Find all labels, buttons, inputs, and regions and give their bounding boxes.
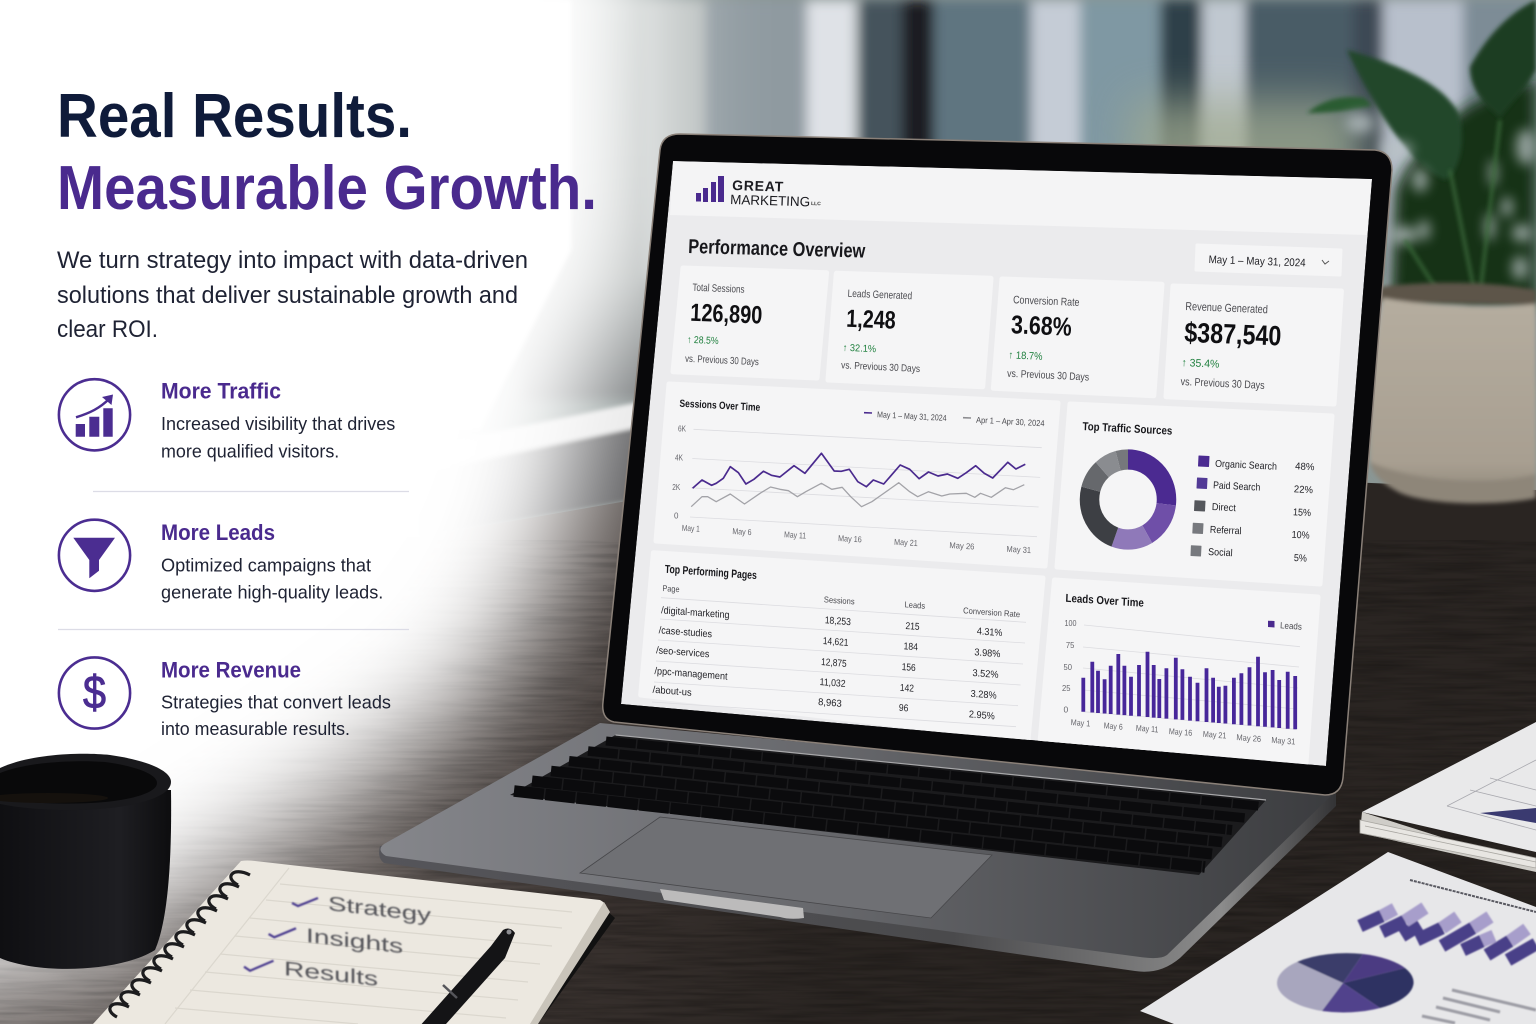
benefit: more leads: generate high-quality leads. bbox=[161, 583, 383, 603]
KPI card: total sessions: Total Sessions bbox=[692, 282, 745, 296]
table row: about us bbox=[652, 685, 995, 722]
chart axes bbox=[672, 424, 1042, 555]
leads chart axes: May 31 bbox=[1271, 735, 1296, 747]
KPI card: total sessions: 126,890 bbox=[690, 299, 763, 330]
leads chart axes: May 26 bbox=[1236, 732, 1262, 744]
KPI card: leads generated bbox=[828, 273, 991, 387]
leads chart axes: May 6 bbox=[1104, 720, 1123, 732]
papers: lower report with charts bbox=[1140, 852, 1536, 1024]
table row: ppc management: 3.28% bbox=[970, 689, 997, 702]
paper pie chart bbox=[1277, 953, 1414, 1012]
notebook spiral binding bbox=[110, 872, 250, 1017]
benefit: more leads: More Leads bbox=[161, 520, 275, 545]
KPI card: total sessions: vs. Previous 30 Days bbox=[685, 354, 759, 368]
plant bbox=[1307, 0, 1536, 305]
table row: ppc management: /ppc-management bbox=[654, 666, 728, 683]
line: previous period bbox=[691, 483, 1024, 507]
laptop base bbox=[379, 723, 1336, 972]
table row: digital marketing: 4.31% bbox=[977, 626, 1003, 639]
wood grain bbox=[0, 540, 1536, 1024]
chart axes: May 11 bbox=[784, 529, 807, 541]
checklist bbox=[244, 893, 431, 991]
table header: Leads bbox=[904, 599, 925, 611]
table row: seo services bbox=[656, 646, 998, 678]
benefit: more revenue bbox=[59, 657, 391, 739]
KPI card: revenue generated bbox=[1166, 286, 1341, 404]
notebook ruled lines bbox=[165, 868, 572, 1024]
KPI card: total sessions bbox=[673, 268, 827, 378]
table row: about us: 8,963 bbox=[818, 697, 842, 710]
company logo bbox=[696, 176, 821, 209]
chart axes: May 26 bbox=[949, 540, 975, 552]
coffee mug bbox=[0, 754, 171, 969]
table row: case studies: /case-studies bbox=[658, 625, 712, 640]
table header bbox=[663, 585, 1020, 618]
leads chart legend: Leads bbox=[1280, 620, 1302, 632]
line: current period bbox=[693, 453, 1025, 488]
dashboard header bar bbox=[670, 161, 1372, 235]
laptop lid and bezel bbox=[603, 134, 1392, 795]
table header: Conversion Rate bbox=[963, 605, 1021, 619]
KPI card: revenue generated: vs. Previous 30 Days bbox=[1180, 376, 1265, 392]
intro paragraph: We turn strategy into impact with data-driven bbox=[57, 247, 528, 274]
KPI card: leads generated: 1,248 bbox=[846, 305, 896, 335]
leads bar chart bbox=[1083, 652, 1295, 729]
chart axes: May 31 bbox=[1006, 544, 1031, 555]
icon: dollar sign: $ bbox=[83, 666, 106, 718]
company logo: LLC bbox=[811, 201, 821, 207]
icon: dollar sign bbox=[59, 657, 130, 729]
KPI card: conversion rate: Conversion Rate bbox=[1013, 294, 1080, 309]
chart axes: May 21 bbox=[894, 537, 918, 548]
KPI card: conversion rate: vs. Previous 30 Days bbox=[1007, 368, 1089, 384]
trackpad bbox=[580, 817, 992, 918]
leads chart axes: May 21 bbox=[1203, 729, 1227, 741]
checklist: Strategy bbox=[328, 893, 431, 927]
pen bbox=[422, 929, 515, 1024]
benefit: more traffic: more qualified visitors. bbox=[161, 441, 339, 461]
table row: seo services: 12,875 bbox=[821, 657, 847, 670]
table header: Sessions bbox=[824, 594, 855, 606]
traffic legend: Direct bbox=[1212, 502, 1236, 514]
table row: ppc management bbox=[654, 666, 997, 702]
table row: case studies: 3.98% bbox=[974, 647, 1001, 660]
panel: sessions over time bbox=[656, 384, 1058, 566]
table row: case studies: 184 bbox=[903, 641, 918, 653]
leads chart axes: May 11 bbox=[1136, 723, 1159, 735]
desk surface bbox=[0, 480, 1536, 1024]
leads chart axes: May 1 bbox=[1071, 717, 1091, 729]
benefit: more leads: Optimized campaigns that bbox=[161, 555, 371, 575]
KPI card: conversion rate: ↑ 18.7% bbox=[1008, 349, 1043, 363]
chart axes: 2K bbox=[672, 483, 681, 492]
table row: digital marketing bbox=[661, 606, 1002, 636]
leads chart axes: May 16 bbox=[1169, 726, 1193, 738]
donut chart bbox=[1090, 459, 1166, 540]
leads chart axes: 100 bbox=[1064, 618, 1077, 628]
traffic legend: Social bbox=[1208, 547, 1233, 559]
table row: about us: 96 bbox=[899, 703, 909, 714]
chart legend: Apr 1 – Apr 30, 2024 bbox=[976, 415, 1045, 428]
lid notch bbox=[660, 889, 804, 919]
dashboard screen bbox=[621, 161, 1372, 766]
title: Measurable Growth. bbox=[57, 154, 597, 223]
table header: Page bbox=[662, 583, 680, 594]
panel: top performing pages: Top Performing Pages bbox=[665, 564, 757, 582]
chart axes: 0 bbox=[674, 512, 679, 521]
benefit: more leads bbox=[59, 520, 383, 603]
white fade behind copy bbox=[0, 0, 650, 1024]
panel: top traffic sources: Top Traffic Sources bbox=[1082, 421, 1172, 438]
chart axes: May 16 bbox=[838, 533, 862, 544]
traffic legend: Organic Search bbox=[1215, 459, 1277, 473]
checklist: Results bbox=[284, 958, 378, 991]
panel: leads over time bbox=[1040, 580, 1318, 763]
KPI card: revenue generated: ↑ 35.4% bbox=[1181, 357, 1220, 371]
company logo: GREAT bbox=[732, 177, 784, 195]
checklist: Insights bbox=[306, 925, 403, 958]
table row: ppc management: 11,032 bbox=[819, 677, 846, 690]
keyboard bbox=[510, 735, 1266, 875]
chart legend: May 1 – May 31, 2024 bbox=[877, 409, 947, 423]
table row: digital marketing: 18,253 bbox=[825, 615, 851, 628]
leads chart axes: 75 bbox=[1066, 640, 1075, 650]
traffic legend: 5% bbox=[1294, 553, 1307, 565]
table row: seo services: 156 bbox=[901, 662, 916, 674]
panel: top performing pages bbox=[641, 553, 1043, 740]
table row: case studies bbox=[658, 625, 1001, 660]
chart axes: May 1 bbox=[682, 523, 700, 534]
traffic legend: Referral bbox=[1210, 525, 1242, 537]
table row: digital marketing: /digital-marketing bbox=[661, 605, 730, 621]
heading: performance overview: Performance Overview bbox=[688, 236, 866, 263]
intro paragraph: solutions that deliver sustainable growth and bbox=[57, 282, 518, 309]
KPI card: leads generated: ↑ 32.1% bbox=[842, 343, 876, 355]
panel: sessions over time: Sessions Over Time bbox=[679, 398, 761, 414]
leads chart axes: 0 bbox=[1064, 705, 1068, 715]
benefit: more revenue: into measurable results. bbox=[161, 719, 350, 739]
title bbox=[57, 82, 597, 223]
table row: ppc management: 142 bbox=[900, 683, 914, 695]
gaps between leaves bbox=[1346, 113, 1536, 280]
panel: top traffic sources bbox=[1057, 404, 1332, 584]
chart axes: 4K bbox=[675, 454, 684, 463]
chart axes: May 6 bbox=[732, 526, 752, 537]
title: Real Results. bbox=[57, 82, 412, 151]
company logo: MARKETING bbox=[730, 192, 810, 209]
table row: about us: 2.95% bbox=[969, 709, 995, 722]
panel: leads over time: Leads Over Time bbox=[1065, 593, 1144, 610]
traffic legend: Paid Search bbox=[1213, 480, 1261, 494]
table row: digital marketing: 215 bbox=[905, 621, 920, 633]
traffic legend: 15% bbox=[1293, 507, 1311, 519]
leads chart axes: 50 bbox=[1064, 662, 1072, 672]
table row: seo services: /seo-services bbox=[656, 645, 710, 660]
date range selector bbox=[1196, 245, 1341, 275]
intro paragraph: clear ROI. bbox=[57, 316, 158, 343]
KPI card: conversion rate bbox=[993, 279, 1162, 396]
KPI card: revenue generated: $387,540 bbox=[1184, 317, 1282, 352]
traffic legend: 22% bbox=[1294, 484, 1313, 496]
chart axes: 6K bbox=[678, 424, 687, 433]
table row: case studies: 14,621 bbox=[823, 636, 849, 649]
icon: funnel bbox=[59, 520, 130, 591]
leads chart legend bbox=[1268, 620, 1302, 630]
intro paragraph bbox=[57, 247, 528, 343]
leads chart axes bbox=[1062, 618, 1300, 747]
benefit: more revenue: Strategies that convert leads bbox=[161, 692, 391, 712]
KPI card: total sessions: ↑ 28.5% bbox=[687, 335, 719, 347]
window sill band bbox=[420, 400, 650, 537]
traffic legend bbox=[1191, 456, 1315, 565]
benefit: more traffic: Increased visibility that drives bbox=[161, 414, 395, 434]
icon: rising bars and arrow bbox=[59, 379, 130, 450]
papers: upper stack bbox=[1360, 722, 1536, 872]
notebook bbox=[93, 860, 615, 1024]
date range selector: May 1 – May 31, 2024 bbox=[1208, 254, 1306, 269]
benefit: more traffic: More Traffic bbox=[161, 378, 281, 403]
table row: seo services: 3.52% bbox=[972, 668, 999, 681]
leads chart axes: 25 bbox=[1062, 683, 1071, 693]
chart legend bbox=[864, 412, 1044, 426]
KPI card: revenue generated: Revenue Generated bbox=[1185, 301, 1268, 316]
KPI card: conversion rate: 3.68% bbox=[1011, 309, 1072, 342]
benefit: more revenue: More Revenue bbox=[161, 657, 301, 682]
KPI card: leads generated: Leads Generated bbox=[847, 288, 912, 302]
KPI card: leads generated: vs. Previous 30 Days bbox=[841, 360, 920, 375]
traffic legend: 10% bbox=[1291, 530, 1310, 542]
plant pot bbox=[1370, 283, 1536, 503]
table row: about us: /about-us bbox=[652, 685, 692, 699]
traffic legend: 48% bbox=[1295, 461, 1315, 473]
benefit: more traffic bbox=[59, 378, 395, 461]
